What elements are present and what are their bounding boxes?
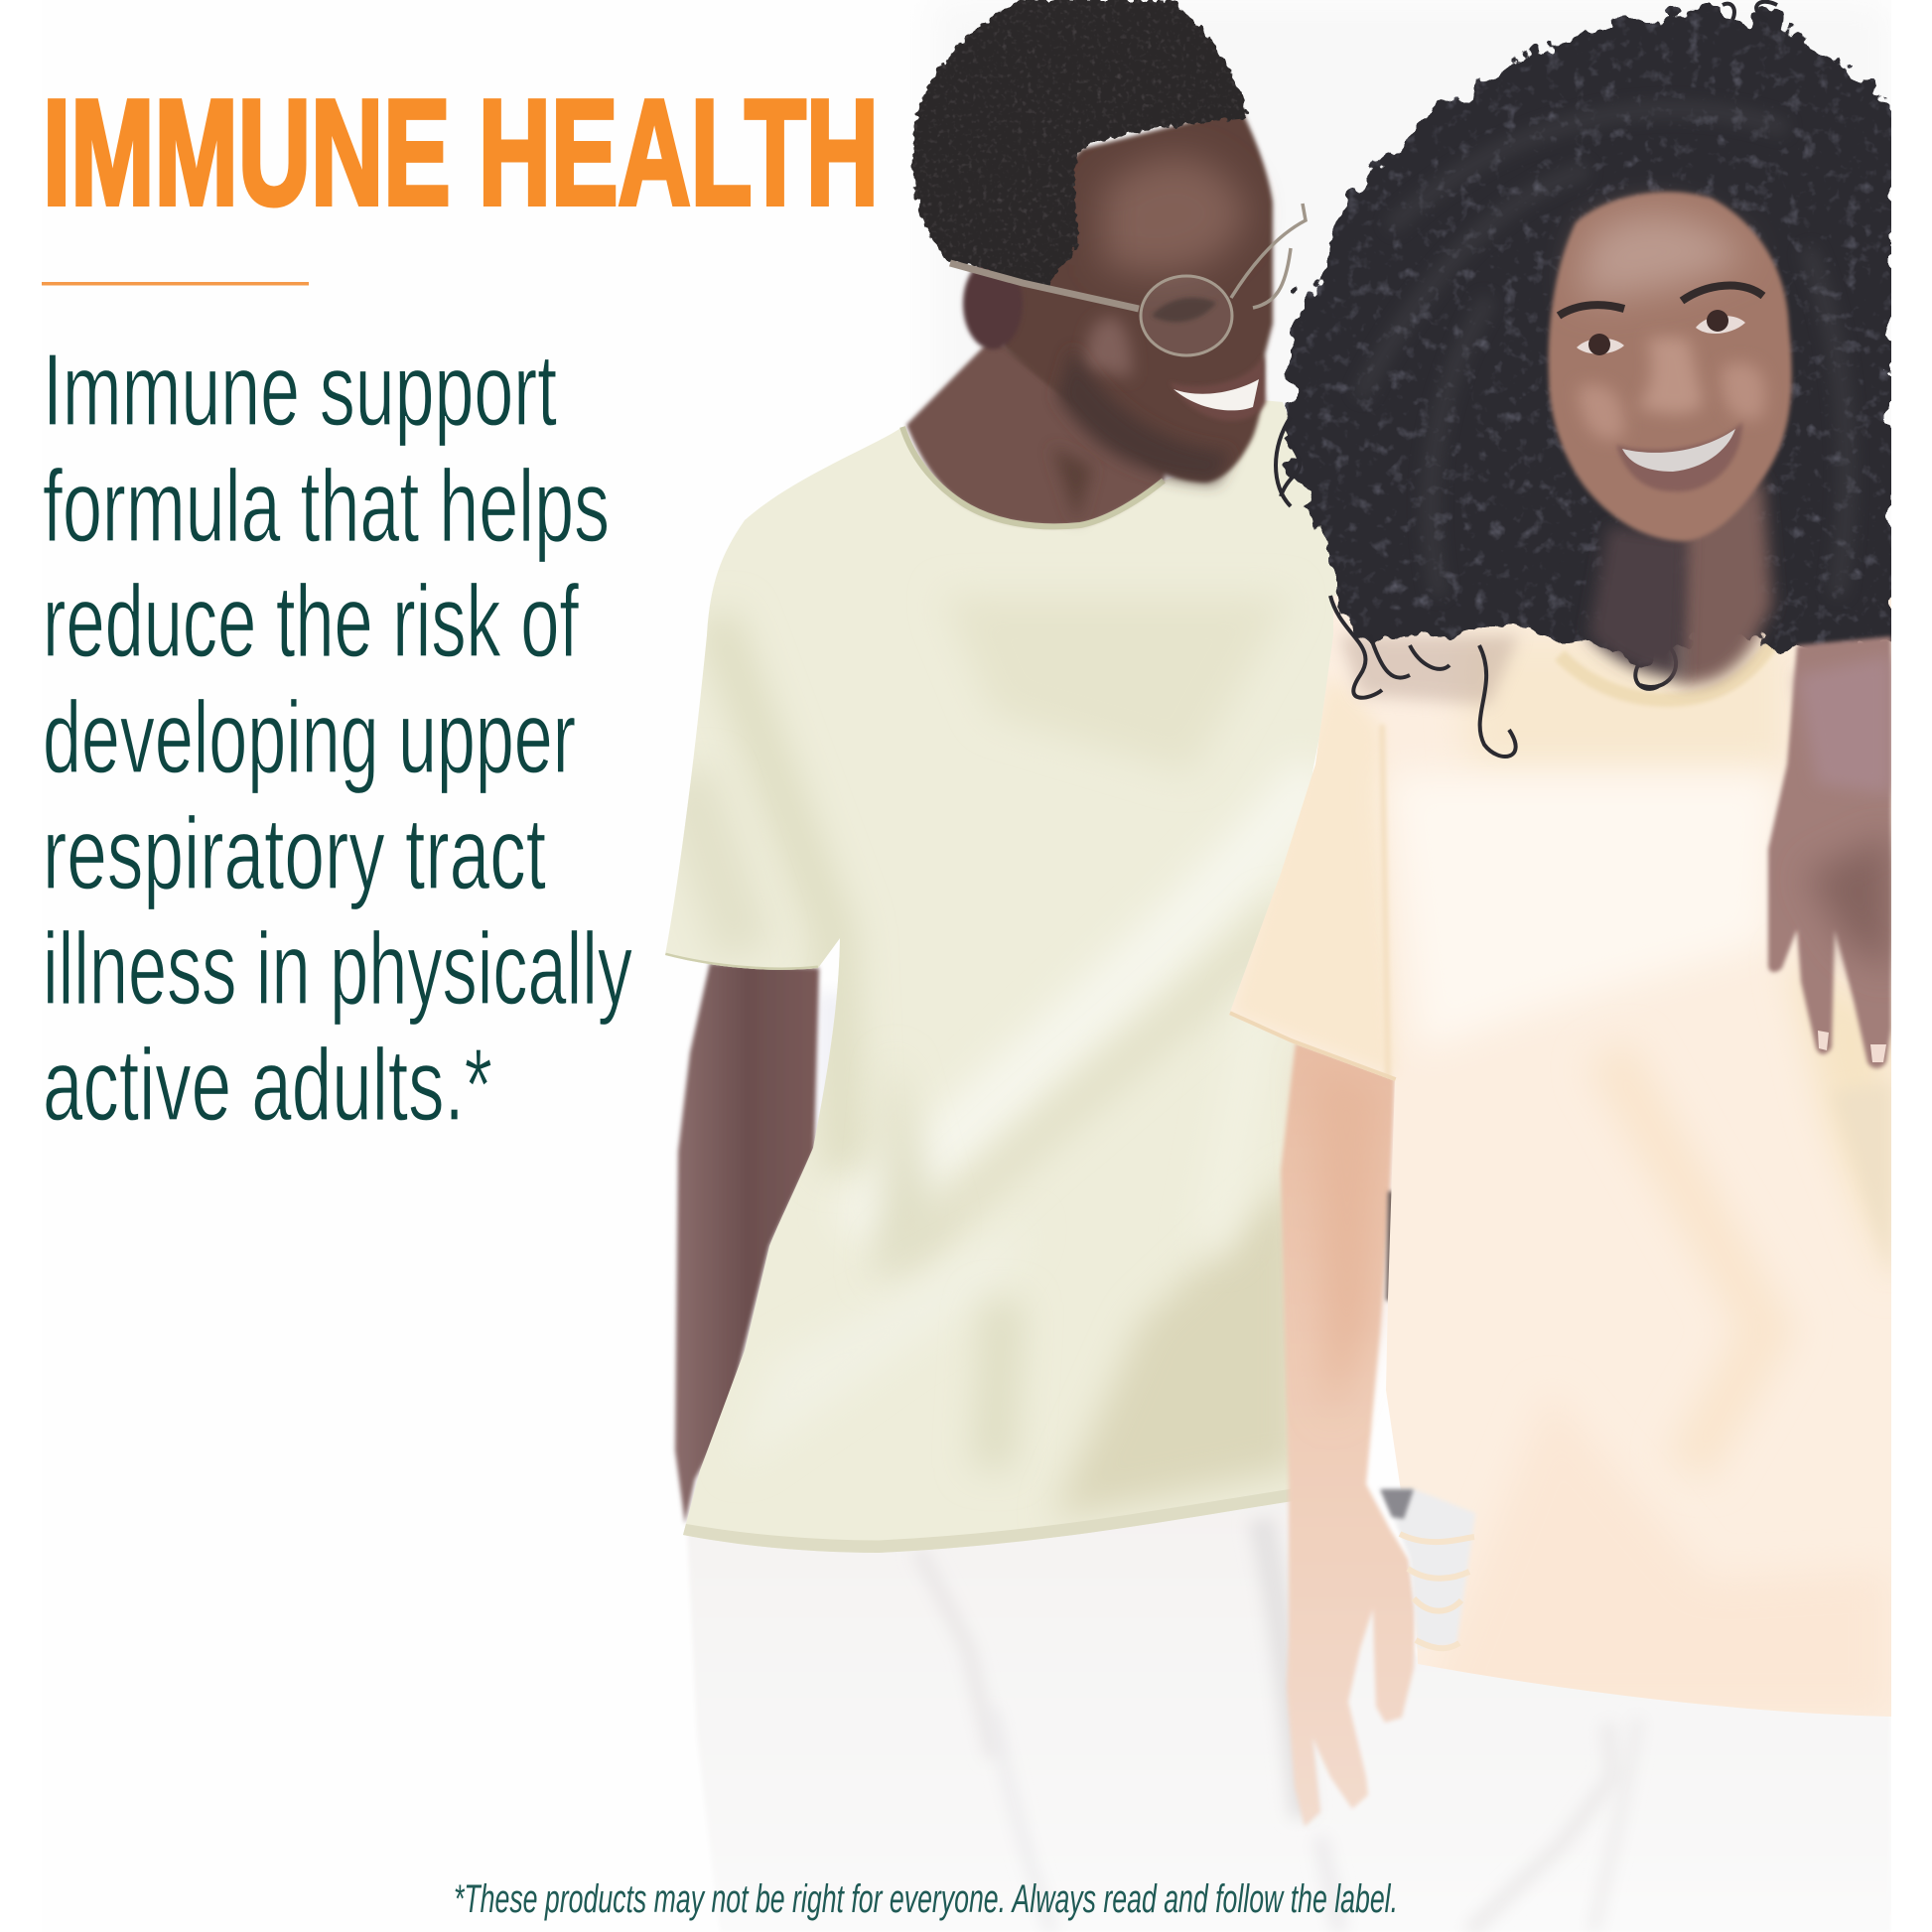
ear — [963, 258, 1023, 349]
curls — [1276, 2, 1777, 757]
woman's neck — [1588, 477, 1772, 684]
body text: Immune support — [43, 333, 557, 447]
woman's t-shirt — [1221, 596, 1896, 1727]
eye — [1152, 298, 1216, 322]
man's neck — [906, 338, 1172, 526]
body text: respiratory tract — [43, 796, 546, 910]
man's head — [912, 0, 1306, 483]
eyes — [1577, 316, 1745, 354]
right white margin — [1891, 0, 1932, 1932]
body text — [43, 333, 632, 1142]
woman's arm and hand — [1281, 1042, 1416, 1827]
hair — [912, 0, 1247, 288]
lips — [1616, 422, 1742, 491]
man's t-shirt — [635, 397, 1350, 1569]
eyebrows — [1559, 286, 1763, 316]
tear in the woman's shirt — [1380, 1489, 1475, 1648]
mouth — [1170, 355, 1266, 421]
photo: couple smiling — [665, 0, 1891, 1932]
man's and woman's pale trousers — [687, 1489, 1891, 1932]
woman's hair — [1276, 2, 1891, 757]
teeth with braces — [1622, 429, 1735, 472]
body text: illness in physically — [43, 911, 632, 1026]
title: IMMUNE HEALTH — [43, 68, 879, 236]
face — [993, 109, 1273, 483]
man's right arm — [675, 963, 819, 1524]
orange divider — [42, 282, 309, 286]
glasses — [950, 204, 1306, 355]
body text: active adults.* — [43, 1028, 492, 1142]
body text: formula that helps — [43, 449, 610, 563]
body text: reduce the risk of — [43, 564, 579, 678]
footnote: *These products may not be right for everyone. Always read and follow the label. — [454, 1877, 1398, 1921]
man's hand on woman's shoulder — [1768, 636, 1891, 1068]
teeth — [1173, 379, 1259, 410]
woman's face — [1549, 192, 1792, 541]
man's shirt collar — [902, 427, 1164, 526]
body text: developing upper — [43, 680, 576, 794]
